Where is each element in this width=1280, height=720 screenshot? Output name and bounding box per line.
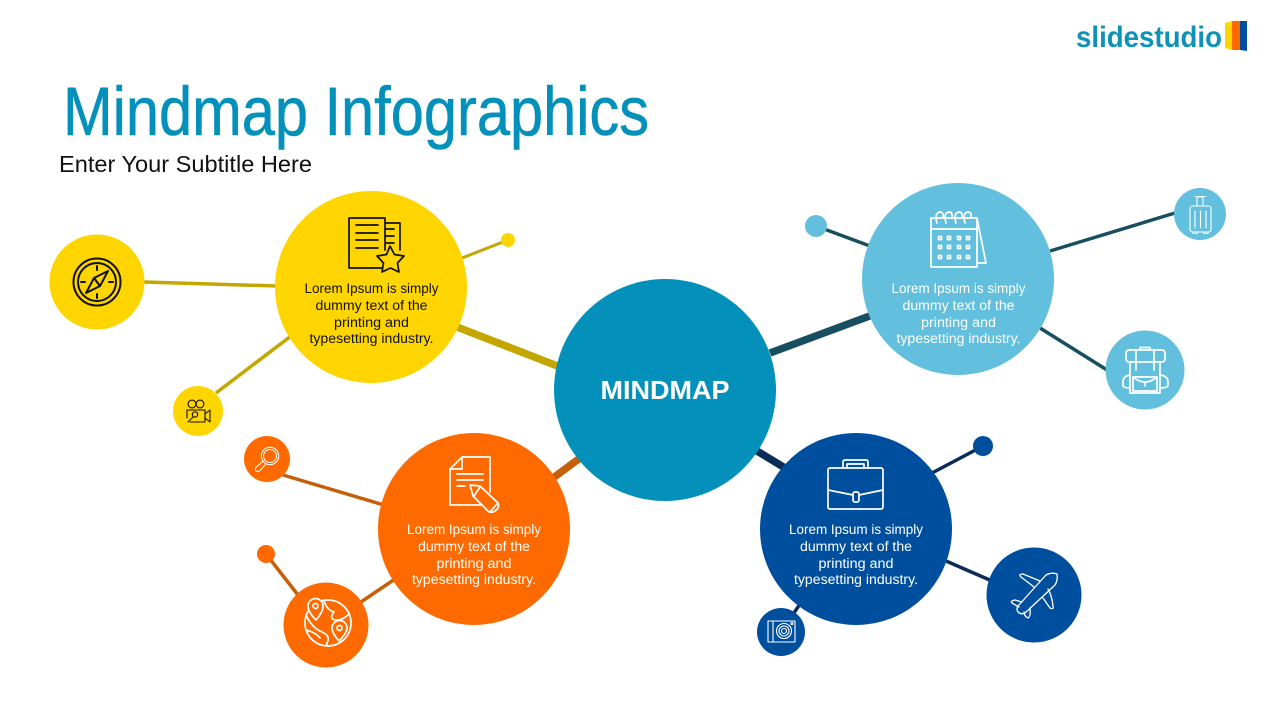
text: orange topic [407, 522, 541, 587]
text: light blue topic: printing and [921, 315, 996, 330]
node: magnifier [244, 436, 290, 482]
node: backpack [1106, 330, 1184, 410]
node: navy dot [973, 436, 993, 456]
panel: navy topic [760, 433, 952, 625]
panel: light blue topic [862, 183, 1054, 375]
icon: suitcase [1190, 196, 1211, 234]
text: navy topic: printing and [818, 556, 894, 571]
icon: plane [1011, 573, 1057, 618]
connector: yellow to dot [462, 240, 508, 258]
connector: orange to globe [361, 579, 395, 602]
connector: navy to dot [932, 446, 983, 473]
text: navy topic: typesetting industry. [794, 572, 918, 587]
text: light blue topic: dummy text of the [902, 298, 1014, 313]
connector: light blue to suitcase [1050, 213, 1175, 251]
title: Mindmap Infographics [63, 73, 649, 150]
text: yellow topic: typesetting industry. [310, 331, 434, 346]
connector: yellow to compass [144, 282, 277, 286]
text: yellow topic: dummy text of the [316, 298, 428, 313]
connector: centre to light blue [770, 314, 875, 353]
node: compass [50, 234, 144, 330]
text: yellow topic [304, 281, 439, 346]
node: yellow dot [501, 233, 515, 247]
text: navy topic [789, 522, 923, 587]
connector: orange to magnifier [283, 475, 384, 505]
node: suitcase [1174, 188, 1226, 240]
branch: light blue [805, 183, 1226, 410]
node: plane [986, 548, 1082, 642]
node: globe [284, 582, 368, 668]
node: light blue dot [805, 215, 827, 237]
text: orange topic: dummy text of the [418, 539, 530, 554]
panel: yellow topic [275, 191, 467, 383]
icon: globe with pins [305, 598, 351, 646]
text: light blue topic: Lorem Ipsum is simply [892, 281, 1026, 296]
connector: light blue to dot [816, 226, 870, 246]
connector: light blue to backpack [1040, 328, 1107, 370]
node: camera [757, 608, 805, 656]
text: light blue topic [892, 281, 1026, 346]
text: orange topic: typesetting industry. [412, 572, 536, 587]
text: yellow topic: Lorem Ipsum is simply [304, 281, 439, 296]
connector: centre to yellow [457, 327, 560, 367]
text: navy topic: Lorem Ipsum is simply [789, 522, 923, 537]
panel: orange topic [378, 433, 570, 625]
connector: centre to orange [553, 458, 580, 478]
branch: yellow [50, 191, 515, 436]
central node [554, 279, 776, 501]
node: video camera [173, 386, 223, 436]
subtitle: Enter Your Subtitle Here [59, 151, 312, 177]
icon: document with pencil [450, 457, 499, 512]
icon: compass [74, 258, 120, 306]
logo: slidestudio [1076, 21, 1222, 54]
node: orange dot [257, 545, 275, 563]
connector: navy to camera [781, 604, 800, 632]
icon: camera [768, 621, 795, 642]
text: navy topic: dummy text of the [800, 539, 912, 554]
connector: globe to dot [266, 554, 298, 595]
connector: navy to plane [946, 561, 992, 581]
icon: briefcase [828, 460, 883, 509]
text: orange topic: printing and [436, 556, 512, 571]
icon: document with star [349, 218, 404, 272]
icon: calendar [931, 212, 986, 267]
branch: navy [757, 433, 1082, 656]
text: orange topic: Lorem Ipsum is simply [407, 522, 541, 537]
central label: MINDMAP [600, 375, 730, 405]
icon: magnifier [255, 447, 279, 472]
branch: orange [244, 433, 570, 668]
icon: backpack [1123, 348, 1168, 393]
connector: yellow to video camera [216, 336, 291, 393]
icon: video camera [187, 400, 210, 422]
text: yellow topic: printing and [334, 315, 409, 330]
connector: centre to navy [757, 451, 785, 468]
text: light blue topic: typesetting industry. [896, 331, 1020, 346]
